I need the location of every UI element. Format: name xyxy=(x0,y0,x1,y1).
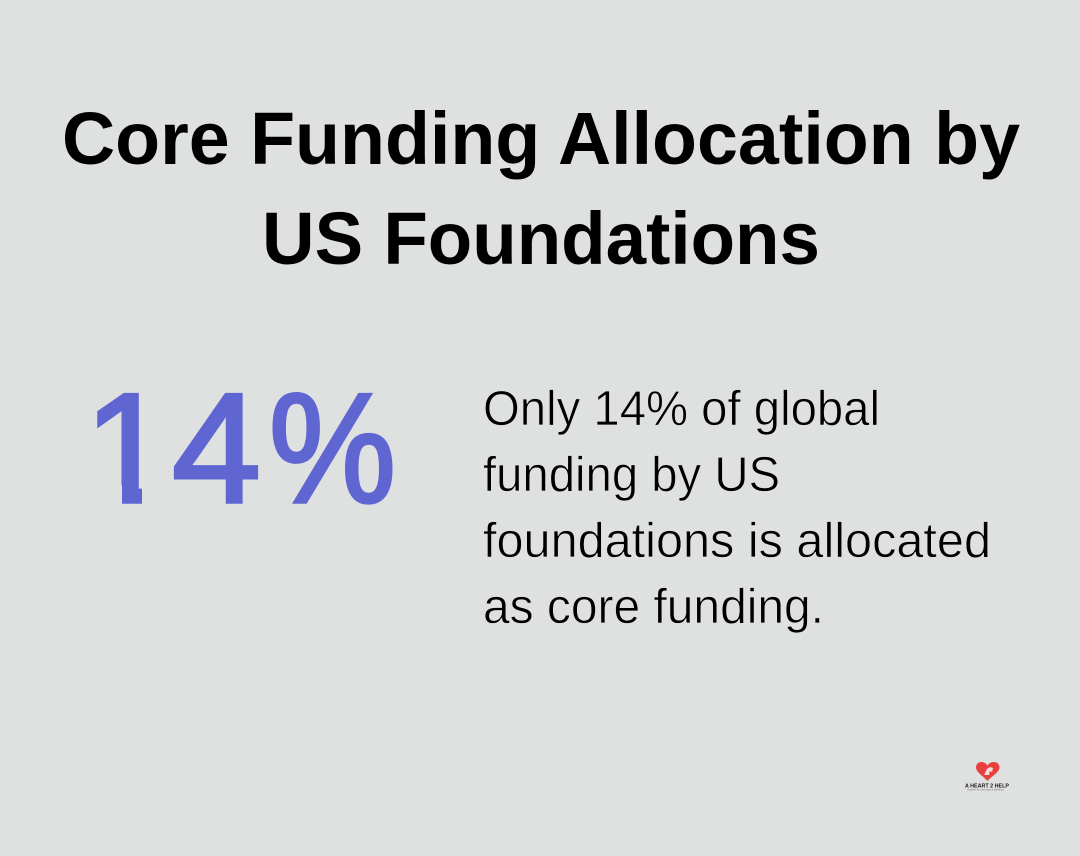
big statistic: 14% xyxy=(84,362,396,536)
description text: as core funding. xyxy=(483,580,824,634)
big statistic: 14%: 4 xyxy=(172,362,261,536)
icon: heart xyxy=(976,762,1000,781)
description text: foundations is allocated xyxy=(483,514,991,568)
icon: hands in heart xyxy=(984,767,993,775)
logo wordmark: A HEART 2 HELP xyxy=(965,784,1009,790)
description text xyxy=(483,382,991,634)
title: Core Funding Allocation by xyxy=(62,97,1020,180)
description text: Only 14% of global xyxy=(483,382,880,436)
big statistic: 14%: % xyxy=(269,362,396,536)
logo: A Heart 2 Help xyxy=(965,762,1009,792)
description text: funding by US xyxy=(483,448,780,502)
title: US Foundations xyxy=(262,197,820,280)
title xyxy=(62,97,1020,280)
big statistic: 14%: 1 xyxy=(84,362,171,536)
logo tagline: Together we can make a difference xyxy=(967,788,1005,792)
